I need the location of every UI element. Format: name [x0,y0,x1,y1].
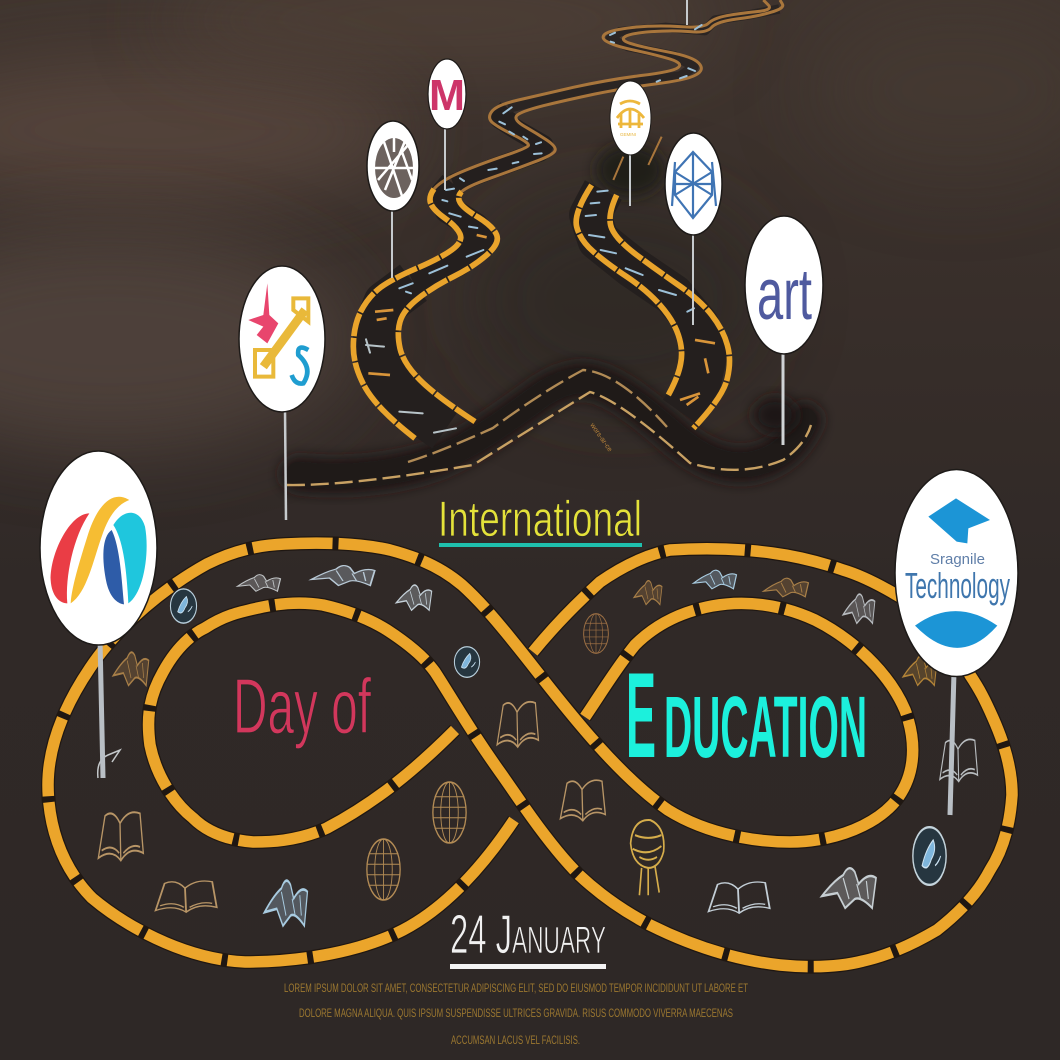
date underline [450,964,606,969]
icon: wide tan book [156,881,217,912]
icon: planet [454,647,480,677]
icon: tan book centre [497,702,538,747]
distant black road with dashed lines [287,370,811,485]
icon: blue globe [170,589,197,623]
icon: tan key [764,578,808,597]
icon: open book sketch [238,575,280,591]
icon: blue earth [913,827,946,885]
pin: art logo [745,216,823,445]
pin: technology logo: Sragnile [930,551,985,568]
icon: white book right [940,739,978,782]
pin: top distant pole [686,0,688,25]
pin: multicolour logo [40,451,157,778]
icon: tan bundle [903,656,937,685]
icon: tan book left [98,812,143,861]
icon: globe one [433,782,466,843]
icon: tan tool [634,581,662,605]
pin: aperture logo [367,121,419,278]
body text: LOREM IPSUM DOLOR SIT AMET, CONSECTETUR ADIPISCING ELIT, SED DO EIUSMOD TEMPOR INCIDIDUNT UT LABORE ET [284,981,748,995]
right road left edge [576,185,682,395]
pin: gold emblem: GEMINI [620,132,636,137]
far winding road [353,0,783,438]
icon: notebook [396,585,432,610]
icon: blue torch sketch [265,881,307,926]
icon: tan head [113,652,149,686]
icon: tan grid book [560,780,605,821]
infinity road [48,543,1012,967]
icon: globe two [367,839,400,900]
heading: Education: E [626,647,656,783]
icon: blue book [694,570,736,589]
heading: International: International [438,491,642,547]
body text: ACCUMSAN LACUS VEL FACILISIS. [451,1033,580,1047]
road surfaces [375,9,779,430]
pin: gold emblem [610,81,651,206]
pin: M logo [428,59,466,190]
pin: arrow and S logo [239,266,325,520]
distant black road with dashed lines: wors-ar-ce [588,421,613,453]
date: 24 January: 24 JANUARY [450,903,606,965]
icon: yellow figure [631,820,664,895]
icon: globe three [584,614,608,653]
left road right edge far [462,0,783,192]
body text [284,981,748,1047]
left road left edge far [434,0,769,189]
strand: inner left lobe into outer right lobe [149,549,1012,967]
shadow blob behind far road [596,144,664,196]
right road right edge [610,195,729,428]
heading underline [439,543,642,547]
icon: white shell [843,594,875,623]
road fragments near gold pin [613,137,662,180]
body text: DOLORE MAGNA ALIQUA. QUIS IPSUM SUSPENDISSE ULTRICES GRAVIDA. RISUS COMMODO VIVERRA MAECENAS [299,1006,733,1020]
icon: white open book [709,882,770,913]
heading: Day of: Day of [233,662,371,750]
icon: white torch [822,868,876,908]
small icons on far roads [366,25,702,433]
icon: small sketch under pin [98,750,120,778]
left road left edge near [353,189,461,438]
icon: torn page sketch [311,566,375,586]
pin: art logo: art [757,255,812,335]
pin: blue star emblem [665,133,722,325]
pin: M logo: M [429,71,465,120]
strand: outer left lobe into inner right lobe [48,543,913,962]
road icons: books, globes and sketches [98,566,978,926]
pin: technology logo [895,470,1018,815]
heading: Education [626,647,867,783]
left road right edge near [398,192,497,422]
